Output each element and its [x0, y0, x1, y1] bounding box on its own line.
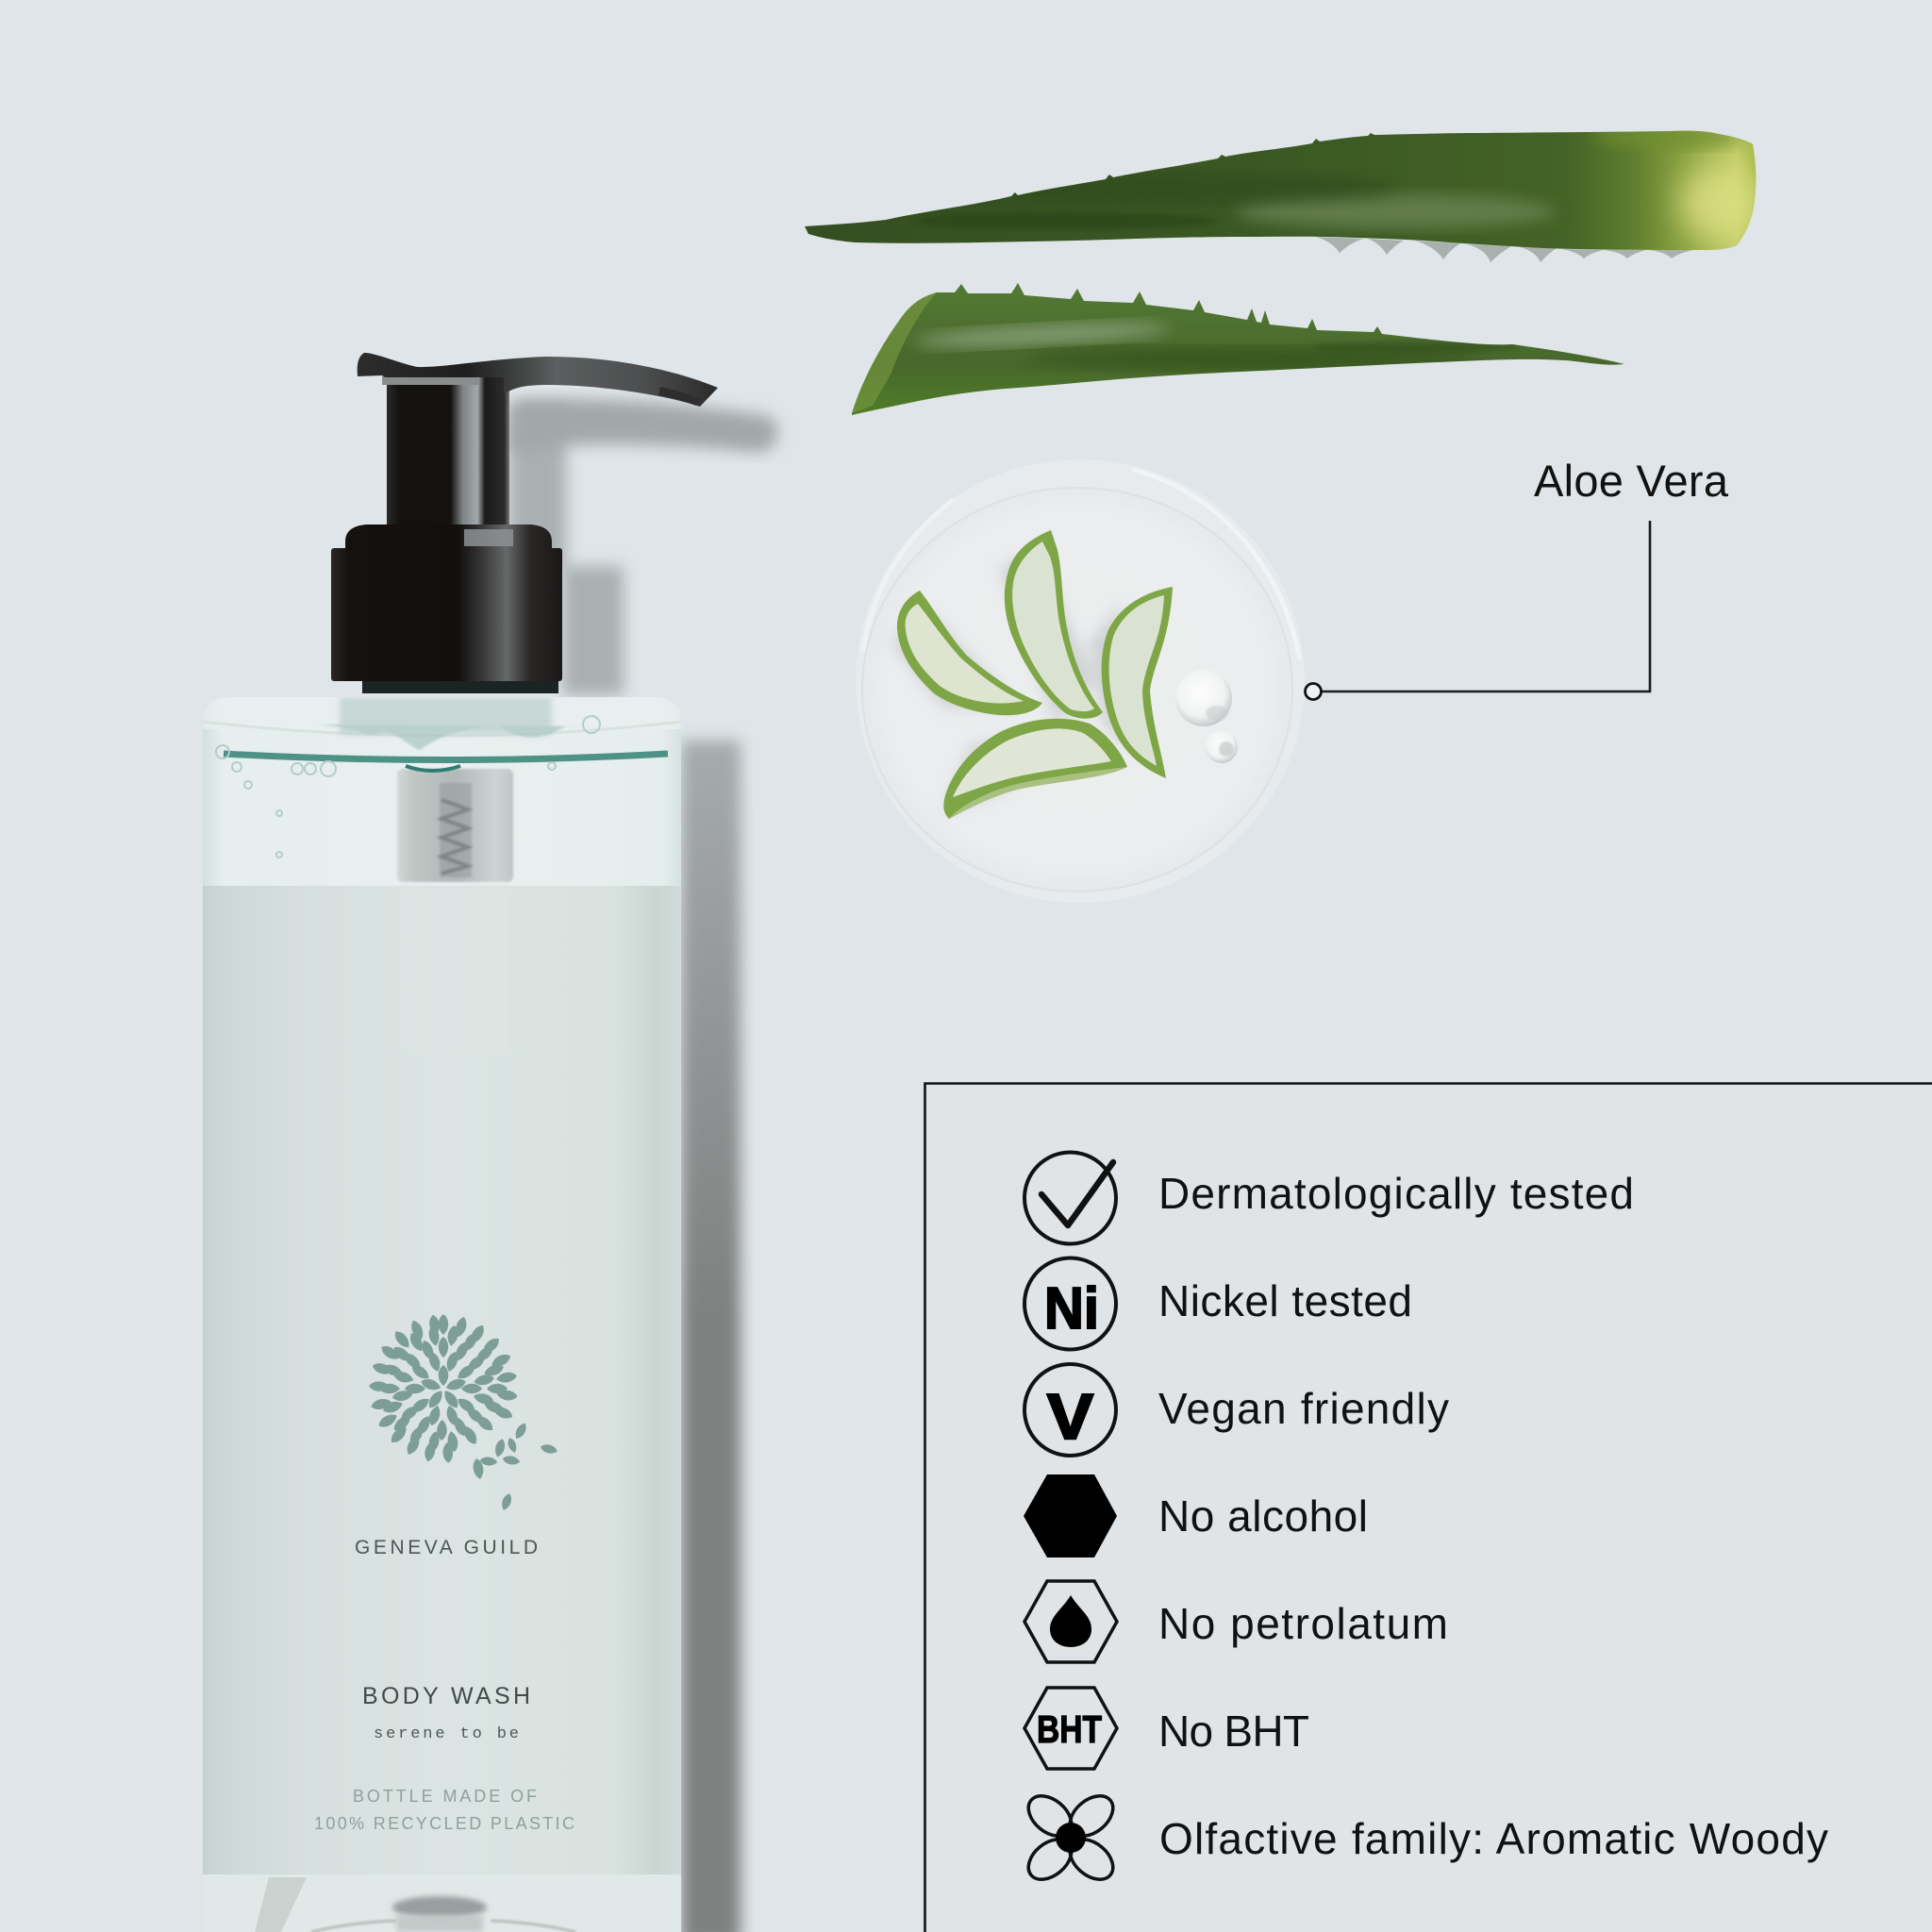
aloe slices	[897, 530, 1173, 819]
bottle shadow	[509, 399, 777, 1932]
claim: no alcohol: No alcohol	[1158, 1491, 1368, 1541]
aloe leaf top	[805, 125, 1764, 262]
gel drops	[1175, 670, 1238, 763]
slice shadows	[891, 557, 1141, 811]
tagline: serene to be	[374, 1725, 519, 1743]
icon: no alcohol hexagon	[1024, 1474, 1117, 1557]
icon: no BHT	[1024, 1688, 1117, 1769]
bottle	[203, 353, 718, 1932]
shoulder highlight	[203, 722, 681, 736]
claim: olfactive family: Olfactive family: Aromatic Woody	[1159, 1814, 1828, 1863]
bottom base	[255, 1877, 307, 1932]
claim: dermatologically tested: Dermatologically tested	[1158, 1169, 1634, 1218]
claim: nickel tested: Nickel tested	[1158, 1276, 1412, 1325]
dish inner	[862, 488, 1292, 891]
bottle body	[203, 697, 681, 1932]
claim: no petrolatum: No petrolatum	[1158, 1599, 1448, 1648]
recycled note	[314, 1787, 575, 1833]
bubbles	[216, 716, 600, 858]
icon: flower	[1021, 1788, 1121, 1888]
leader line	[1322, 521, 1650, 691]
pump tube inside bottle	[397, 769, 513, 882]
liquid line	[224, 754, 668, 760]
claim: vegan friendly: Vegan friendly	[1158, 1384, 1449, 1433]
recycled note: 100% RECYCLED PLASTIC	[314, 1814, 575, 1833]
icon: nickel: Ni	[1044, 1276, 1099, 1341]
icon: check	[1024, 1153, 1116, 1243]
aloe vera label: Aloe Vera	[1534, 456, 1729, 506]
pump collar ring	[362, 679, 558, 693]
leader dot	[1306, 683, 1321, 700]
panel background and border	[924, 1083, 1932, 1932]
recycled note: BOTTLE MADE OF	[353, 1787, 537, 1806]
pump stem	[387, 377, 509, 528]
icon: no BHT: BHT	[1037, 1707, 1102, 1751]
dish rim	[856, 459, 1305, 903]
icon: no petrolatum	[1024, 1581, 1117, 1662]
petri dish with aloe slices	[856, 459, 1305, 903]
thorns under leaf	[1316, 237, 1693, 262]
pump nozzle	[358, 353, 718, 407]
pump cap	[331, 548, 562, 681]
aloe leaf bottom	[852, 283, 1624, 415]
product name: BODY WASH	[362, 1683, 530, 1709]
pump collar	[345, 525, 552, 549]
icon: vegan	[1024, 1364, 1116, 1456]
icon: nickel	[1024, 1258, 1116, 1349]
aloe vera callout	[1306, 456, 1729, 700]
brand name: GENEVA GUILD	[355, 1537, 538, 1558]
panel: product claims	[924, 1083, 1932, 1932]
icon: vegan: V	[1047, 1381, 1093, 1453]
bottle logo	[369, 1314, 558, 1511]
claim: no BHT: No BHT	[1158, 1707, 1309, 1756]
